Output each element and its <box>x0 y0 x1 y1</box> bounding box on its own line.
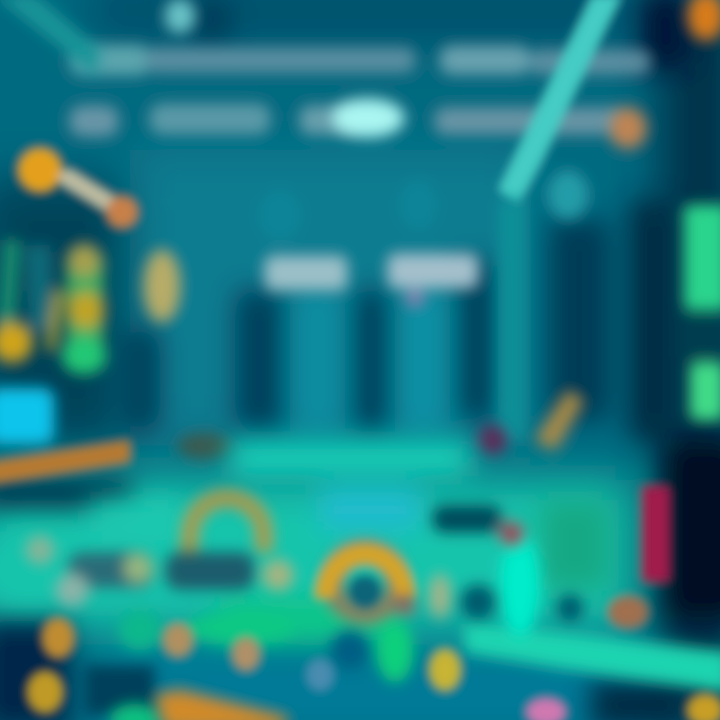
arch chart <box>188 498 264 572</box>
bottom orange band <box>155 690 290 720</box>
center labels <box>258 171 588 307</box>
bottom green patches <box>110 610 413 720</box>
top accents <box>0 0 720 148</box>
orange markers <box>27 618 461 713</box>
floor cyan strip <box>465 622 720 692</box>
dark bars <box>26 536 293 606</box>
left amber panel <box>144 250 180 322</box>
dark item on shelf <box>177 433 233 459</box>
orange tag right <box>535 390 584 450</box>
bright teal column <box>500 533 540 637</box>
title (illegible in reference) <box>70 45 650 136</box>
dark spots <box>85 584 584 715</box>
dark capsule with red dot <box>432 505 524 546</box>
diagonal light beam <box>498 0 622 205</box>
left ring chart <box>0 240 106 374</box>
maroon dot <box>477 425 507 455</box>
blue screen <box>0 388 54 444</box>
floor highlights <box>0 440 610 640</box>
icon: orange connector <box>18 148 138 228</box>
dark pillars <box>120 200 675 440</box>
right green panels <box>680 205 720 420</box>
donut chart <box>325 550 450 618</box>
title highlight <box>332 99 404 137</box>
bottom right markers <box>306 596 720 720</box>
crimson bar <box>642 486 670 582</box>
right light column <box>498 200 526 440</box>
orange shelf <box>0 440 130 484</box>
